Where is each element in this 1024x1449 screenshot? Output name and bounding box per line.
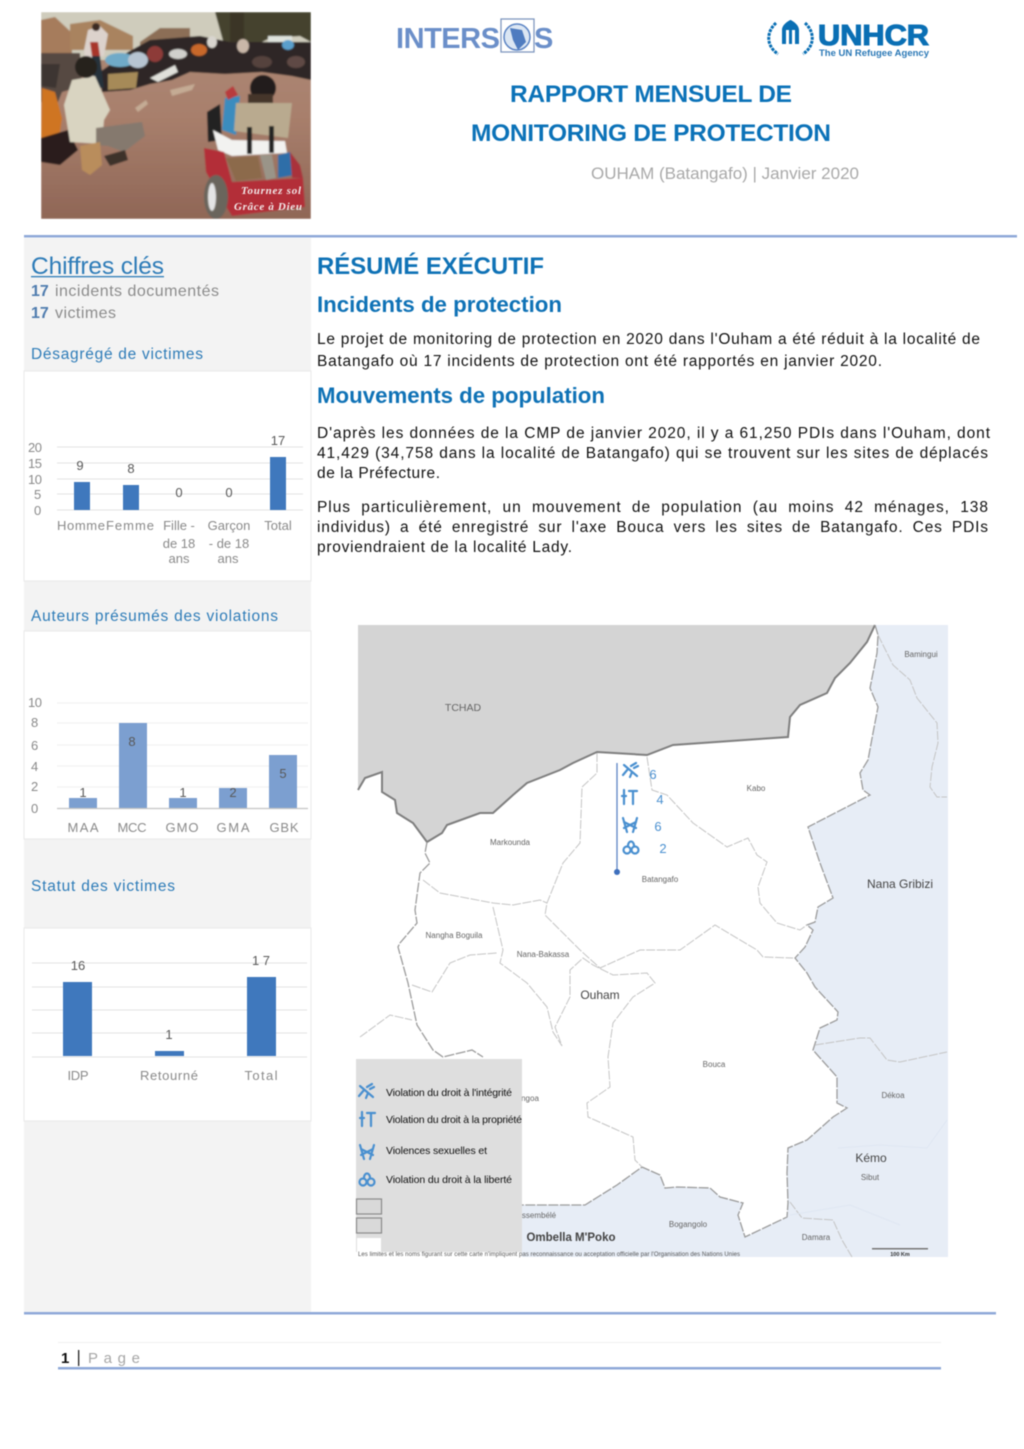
chart: victims by sex and age: Femme bbox=[106, 518, 154, 533]
map callout: Batangafo incident counts: 6 bbox=[654, 819, 662, 834]
heading: population movements: Mouvements de population bbox=[317, 383, 605, 408]
map labels: Bouca bbox=[703, 1060, 726, 1069]
chart: victims by sex and age: ans bbox=[169, 551, 190, 566]
map labels: Ombella M'Poko bbox=[526, 1232, 616, 1244]
chart: alleged perpetrators: 2 bbox=[229, 785, 237, 800]
map labels: Kabo bbox=[747, 784, 766, 793]
chart: victims by sex and age bbox=[24, 371, 311, 581]
chart: victim status: 17 bbox=[252, 953, 270, 968]
chart: victims by sex and age: Fille - bbox=[163, 518, 195, 533]
chart: victims by sex and age: Garçon bbox=[208, 518, 250, 533]
map scale bar: 100 Km bbox=[890, 1252, 910, 1258]
heading: victim status: Statut des victimes bbox=[31, 878, 175, 895]
chart: alleged perpetrators: 10 bbox=[28, 695, 42, 710]
title: MONITORING DE PROTECTION bbox=[471, 120, 831, 147]
text block: displaced people figures: 41,429 (34,758 dans la localité de Batangafo) qui se trouvent sur les sites de déplacés bbox=[317, 445, 988, 462]
chart: victims by sex and age: 9 bbox=[76, 458, 84, 473]
photo caption painted on the wheelchair: Tournez sol bbox=[241, 185, 302, 197]
map area: Chad in grey bbox=[358, 625, 875, 842]
photo caption painted on the wheelchair: Grâce à Dieu bbox=[234, 201, 302, 213]
chart: victim status: 1 bbox=[165, 1027, 173, 1042]
icon: sexual violence bbox=[623, 818, 637, 832]
chart: victims by sex and age: 15 bbox=[28, 456, 42, 471]
text block: protection incidents: Batangafo où 17 incidents de protection ont été rapportés en janvier 2020. bbox=[317, 353, 882, 370]
chart: victims by sex and age: 10 bbox=[28, 472, 42, 487]
chart: alleged perpetrators: 8 bbox=[31, 715, 38, 730]
chart: victim status: Retourné bbox=[140, 1068, 198, 1083]
chart: alleged perpetrators: 4 bbox=[31, 759, 38, 774]
chart: victims by sex and age: 5 bbox=[34, 487, 41, 502]
key figure: victims: victimes bbox=[55, 305, 116, 322]
key figure: victims: 17 bbox=[31, 305, 49, 322]
logo: INTERSOS: INTERS bbox=[396, 23, 500, 55]
chart: alleged perpetrators: 2 bbox=[31, 779, 38, 794]
map labels: Nana Gribizi bbox=[867, 877, 933, 891]
chart: victim status: Total bbox=[244, 1068, 278, 1083]
map callout: Batangafo incident counts: 6 bbox=[649, 767, 657, 782]
footer: page number: 1 bbox=[61, 1350, 69, 1367]
map labels: Nangha Boguila bbox=[426, 931, 483, 940]
map: Ouham prefecture bbox=[356, 625, 948, 1258]
subtitle: OUHAM (Batangafo) | Janvier 2020 bbox=[591, 164, 859, 183]
map labels: Dékoa bbox=[881, 1091, 905, 1100]
chart: victim status bbox=[24, 928, 311, 1121]
text block: movement detail: Plus particulièrement, un mouvement de population (au moins 42 ménages, 138 bbox=[317, 499, 988, 516]
chart: alleged perpetrators: GBK bbox=[270, 820, 299, 835]
chart: victims by sex and age: de 18 bbox=[163, 536, 195, 551]
map labels: Bogangolo bbox=[669, 1220, 708, 1229]
chart: alleged perpetrators: MCC bbox=[118, 820, 146, 835]
photo caption painted on the wheelchair bbox=[234, 185, 302, 213]
photo: community meeting with a person in a hand-cranked wheelchair bbox=[41, 12, 311, 219]
chart: victims by sex and age: ans bbox=[218, 551, 239, 566]
text block: displaced people figures: D'après les données de la CMP de janvier 2020, il y a 61,250 PDIs dans l'Ouham, dont bbox=[317, 425, 991, 442]
footer: page number: Page bbox=[88, 1350, 140, 1367]
text block: movement detail: individus) a été enregistré sur l'axe Bouca vers les sites de Batangafo. Ces PDIs bbox=[317, 519, 988, 536]
map callout: Batangafo incident counts: 4 bbox=[656, 792, 664, 807]
map legend: Violation du droit à la liberté bbox=[386, 1174, 512, 1186]
legend icon: sexual violence bbox=[360, 1145, 374, 1159]
chart: victims by sex and age: - de 18 bbox=[209, 536, 249, 551]
title: RAPPORT MENSUEL DE bbox=[510, 81, 792, 108]
heading: disaggregated victims: Désagrégé de victimes bbox=[31, 346, 203, 363]
map labels bbox=[426, 650, 938, 1244]
chart: victims by sex and age: 0 bbox=[34, 503, 41, 518]
text block: displaced people figures: de la Préfecture. bbox=[317, 465, 440, 482]
chart: alleged perpetrators bbox=[24, 631, 311, 839]
chart: alleged perpetrators: 6 bbox=[31, 738, 38, 753]
heading: protection incidents: Incidents de protection bbox=[317, 292, 562, 317]
logo: UNHCR: UNHCR bbox=[818, 20, 929, 52]
chart: alleged perpetrators: 1 bbox=[79, 785, 87, 800]
chart: victims by sex and age: 0 bbox=[225, 485, 233, 500]
legend icon: integrity violation bbox=[359, 1084, 374, 1098]
key figure: incidents: incidents documentés bbox=[55, 283, 219, 300]
map legend: Violation du droit à la propriété bbox=[386, 1114, 522, 1126]
chart: victims by sex and age: 0 bbox=[175, 485, 183, 500]
footer: page number bbox=[58, 1342, 941, 1370]
map footnote: Les limites et les noms figurant sur cette carte n'impliquent pas reconnaissance ou acceptation officielle par l'Organisation des Nations Unies bbox=[358, 1252, 740, 1258]
panel: left sidebar bbox=[24, 238, 311, 1312]
map legend: Violences sexuelles et bbox=[386, 1145, 487, 1157]
map scale bar bbox=[872, 1248, 928, 1258]
logo: INTERSOS bbox=[396, 19, 553, 55]
top rule bbox=[24, 235, 1017, 238]
chart: alleged perpetrators: 8 bbox=[128, 734, 136, 749]
map callout: Batangafo incident counts bbox=[614, 763, 667, 875]
chart: victims by sex and age: 8 bbox=[127, 461, 135, 476]
legend icon: liberty violation bbox=[360, 1174, 374, 1186]
heading: alleged perpetrators: Auteurs présumés des violations bbox=[31, 608, 278, 625]
legend icon: property violation bbox=[360, 1112, 375, 1126]
logo: UNHCR bbox=[769, 20, 930, 59]
chart: alleged perpetrators: 0 bbox=[31, 801, 38, 816]
chart: victim status: IDP bbox=[68, 1068, 88, 1083]
icon: property violation bbox=[622, 790, 637, 804]
text block: protection incidents: Le projet de monitoring de protection en 2020 dans l'Ouham a été réduit à la localité de bbox=[317, 331, 980, 348]
text block: protection incidents bbox=[317, 331, 980, 370]
chart: victims by sex and age: 17 bbox=[271, 433, 285, 448]
map labels: Batangafo bbox=[642, 875, 679, 884]
map legend: Violation du droit à l'intégrité bbox=[386, 1087, 512, 1099]
heading: executive summary: RÉSUMÉ EXÉCUTIF bbox=[317, 252, 544, 280]
chart: alleged perpetrators: GMO bbox=[166, 820, 198, 835]
text block: movement detail: proviendraient de la localité Lady. bbox=[317, 539, 572, 556]
map labels: Damara bbox=[802, 1233, 831, 1242]
chart: alleged perpetrators: 5 bbox=[279, 766, 287, 781]
map labels: Nana-Bakassa bbox=[517, 950, 570, 959]
key figure: incidents: 17 bbox=[31, 283, 49, 300]
map labels: TCHAD bbox=[445, 702, 481, 714]
legend swatches bbox=[356, 1199, 382, 1233]
text block: movement detail bbox=[317, 499, 988, 556]
logo: INTERSOS: S bbox=[534, 23, 553, 55]
map labels: Markounda bbox=[490, 838, 531, 847]
chart: victims by sex and age: Total bbox=[264, 518, 292, 533]
heading: key figures: Chiffres clés bbox=[31, 253, 164, 280]
bottom rule bbox=[24, 1312, 996, 1314]
title bbox=[471, 81, 831, 147]
chart: victim status: 16 bbox=[71, 958, 85, 973]
map area: Ouham prefecture in white bbox=[358, 625, 878, 1257]
map labels: Ouham bbox=[580, 988, 620, 1002]
map labels: ssembélé bbox=[522, 1211, 557, 1220]
chart: victims by sex and age: Homme bbox=[57, 518, 105, 533]
map labels: Bamingui bbox=[904, 650, 938, 659]
chart: alleged perpetrators: 1 bbox=[179, 785, 187, 800]
map callout: Batangafo incident counts: 2 bbox=[659, 841, 667, 856]
map labels: Sibut bbox=[861, 1173, 880, 1182]
chart: alleged perpetrators: MAA bbox=[68, 820, 99, 835]
chart: victims by sex and age: 20 bbox=[28, 440, 42, 455]
icon: integrity violation bbox=[623, 763, 638, 777]
map labels: ngoa bbox=[521, 1094, 539, 1103]
map labels: Kémo bbox=[855, 1151, 887, 1165]
map legend bbox=[356, 1059, 522, 1253]
text block: displaced people figures bbox=[317, 425, 991, 482]
chart: alleged perpetrators: GMA bbox=[216, 820, 250, 835]
logo: UNHCR: The UN Refugee Agency bbox=[819, 48, 930, 59]
icon: liberty violation bbox=[624, 842, 638, 854]
